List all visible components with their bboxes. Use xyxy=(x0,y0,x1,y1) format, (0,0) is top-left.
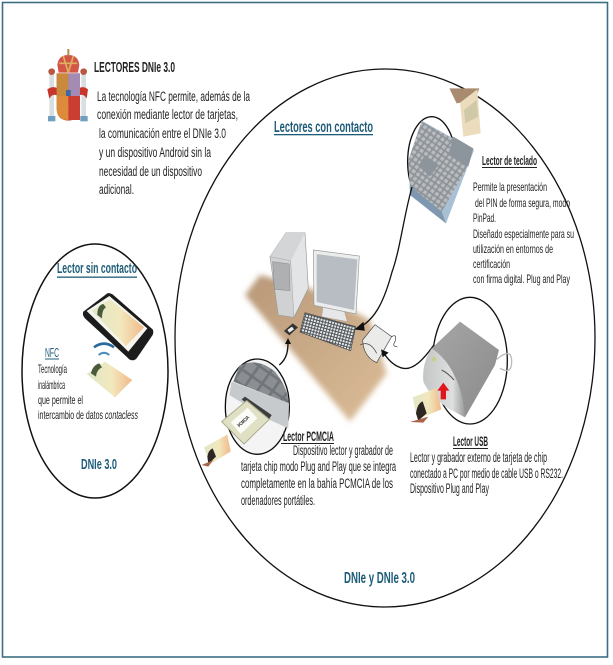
USB reader mini xyxy=(363,325,392,363)
text block: lector USB: Dispositivo Plug and Play xyxy=(410,481,489,496)
text block: lector PCMCIA: completamente en la bahía PCMCIA de los xyxy=(241,476,393,491)
text block: lector PCMCIA: Lector PCMCIA xyxy=(283,428,334,444)
text block: lector de teclado xyxy=(473,154,574,286)
illustration: PC on wooden desk xyxy=(245,233,397,422)
lens outline xyxy=(225,359,289,454)
label: DNIe 3.0: DNIe 3.0 xyxy=(81,456,117,473)
DNIe card xyxy=(413,388,441,419)
text block: introducción NFC: adicional. xyxy=(99,182,134,197)
connector: keyboard reader to PC xyxy=(356,187,412,330)
illustration: PCMCIA reader: PCMCIA xyxy=(237,415,251,429)
text block: NFC: NFC xyxy=(45,346,59,360)
connector to PC xyxy=(279,342,288,365)
text block: lector de teclado: Lector de teclado xyxy=(482,154,537,168)
cable xyxy=(497,354,512,371)
icon: Spanish coat of arms xyxy=(47,49,88,121)
lens outline xyxy=(433,297,507,424)
icon: phone with NFC card xyxy=(83,293,153,397)
text block: introducción NFC: la comunicación entre el DNIe 3.0 xyxy=(99,126,226,141)
heading: lectores con contacto xyxy=(274,119,373,136)
heading: lectores con contacto: Lectores con contacto xyxy=(274,119,373,136)
heading: lector sin contacto: Lector sin contacto xyxy=(57,260,137,277)
text block: lector de teclado: utilización en entornos de xyxy=(473,242,553,256)
title: LECTORES DNIe 3.0 xyxy=(94,60,175,76)
text block: introducción NFC: y un dispositivo Android sin la xyxy=(99,145,211,160)
text block: NFC: intercambio de datos contacless xyxy=(38,408,138,422)
card on phone xyxy=(92,299,144,346)
label: DNIe y DNIe 3.0: DNIe y DNIe 3.0 xyxy=(344,570,415,587)
heading: lector sin contacto xyxy=(57,260,137,278)
reader body xyxy=(432,322,499,417)
DNIe card xyxy=(87,362,132,397)
desk xyxy=(245,275,387,422)
circle: lectores con contacto xyxy=(175,69,595,607)
text block: lector de teclado: certificación xyxy=(473,257,510,271)
text block: lector USB xyxy=(410,433,563,496)
text block: introducción NFC: necesidad de un dispositivo xyxy=(99,164,202,179)
red arrow xyxy=(437,383,449,399)
phone body xyxy=(83,293,153,360)
illustration: USB reader xyxy=(381,297,512,424)
circle: lector sin contacto xyxy=(22,244,168,498)
hand and card xyxy=(449,88,479,103)
reader outline xyxy=(408,117,456,207)
tower xyxy=(270,233,308,317)
text block: lector PCMCIA: ordenadores portátiles. xyxy=(241,493,315,508)
text block: lector USB: Lector USB xyxy=(453,433,488,449)
text block: NFC: que permite el xyxy=(38,393,83,407)
text block: lector de teclado: Permite la presentación xyxy=(473,180,547,194)
PCMCIA card xyxy=(222,401,269,444)
text block: lector PCMCIA xyxy=(241,428,396,508)
monitor xyxy=(322,303,347,322)
text block: lector PCMCIA: Dispositivo lector y grabador de xyxy=(293,443,393,458)
text block: introducción NFC: conexión mediante lector de tarjetas, xyxy=(97,107,238,122)
phone screen xyxy=(87,296,147,352)
text block: introducción NFC xyxy=(97,89,250,197)
text block: NFC: inalámbrica xyxy=(38,378,65,392)
text block: lector PCMCIA: tarjeta chip modo Plug and Play que se integra xyxy=(241,459,396,474)
text block: NFC xyxy=(38,346,138,422)
connector to PC xyxy=(384,343,435,369)
small reader device xyxy=(284,323,298,335)
text block: lector de teclado: PinPad. xyxy=(473,211,496,225)
NFC waves xyxy=(94,344,114,347)
keyboard xyxy=(300,313,356,351)
illustration: PCMCIA reader xyxy=(202,338,291,467)
illustration: keyboard reader xyxy=(408,88,481,223)
text block: NFC: Tecnología xyxy=(38,362,67,376)
text block: introducción NFC: La tecnología NFC permite, además de la xyxy=(97,89,250,104)
reader body xyxy=(408,121,474,223)
DNIe card xyxy=(204,435,231,464)
